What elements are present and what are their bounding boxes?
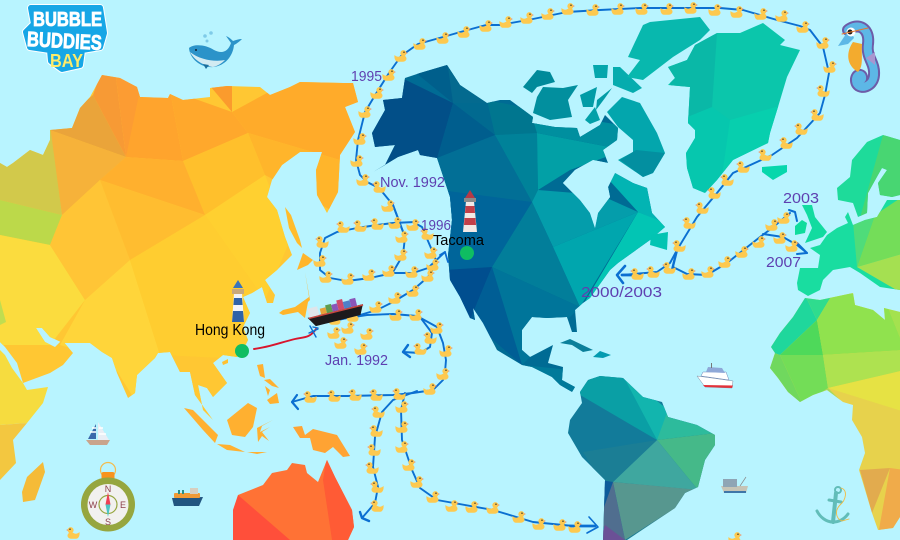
logo: Bubble Buddies Bay: BAY [50, 51, 83, 71]
icon: compass: E [120, 500, 126, 510]
icon: container ship [305, 294, 365, 328]
red shipping route from Hong Kong with spill marker [254, 326, 318, 349]
route labels: 1995 [351, 69, 382, 85]
icon: fishing boat [721, 477, 748, 493]
route labels: 1996 [421, 218, 451, 234]
Sakhalin island [285, 207, 302, 248]
Hudson Bay [563, 160, 615, 228]
icon: ferry [172, 488, 203, 506]
landmass: Japan and Hainan [222, 253, 313, 365]
landmass: Greenland and Iceland [668, 23, 800, 193]
icon: compass: N [105, 484, 111, 494]
icon: Hong Kong lighthouse [232, 280, 244, 322]
landmass: Africa [765, 290, 900, 535]
route labels: Nov. 1992 [380, 175, 445, 191]
icon: anchor [817, 487, 849, 522]
drift routes: blue current lines with arrowheads [292, 8, 829, 533]
landmass: Southeast Asia islands [184, 364, 350, 457]
marker: Tacoma green dot [460, 246, 474, 260]
logo: Bubble Buddies Bay [26, 8, 104, 71]
icon: compass: W [89, 500, 98, 510]
route labels [325, 69, 819, 369]
icon: seahorse [838, 26, 875, 87]
label: Tacoma: Tacoma [433, 232, 485, 249]
logo: Bubble Buddies Bay: BUBBLE [33, 9, 102, 31]
landmass: Asia [0, 70, 370, 420]
label: Hong Kong: Hong Kong [195, 322, 265, 339]
landmass: North America [365, 17, 710, 405]
icon: Tacoma lighthouse [463, 190, 477, 232]
route labels: Jan. 1992 [325, 353, 388, 369]
landmass: Europe and British Isles [790, 130, 900, 300]
icon: compass [81, 462, 135, 532]
route labels: 2007 [766, 255, 801, 271]
Arctic islands and Caribbean [523, 17, 710, 358]
route labels: 2003 [783, 191, 819, 207]
icon: whale [189, 31, 242, 69]
route labels: 2000/2003 [581, 285, 662, 301]
logo: Bubble Buddies Bay: BUDDIES [26, 28, 102, 55]
landmass: South America [568, 376, 715, 540]
icon: cruise ship [697, 363, 733, 388]
icon: compass: S [105, 517, 111, 527]
landmass: Australia [233, 460, 354, 540]
landmass: East Africa and Madagascar [0, 350, 48, 502]
icon: sailboat [86, 422, 110, 445]
marker: Hong Kong green dot [235, 344, 249, 358]
